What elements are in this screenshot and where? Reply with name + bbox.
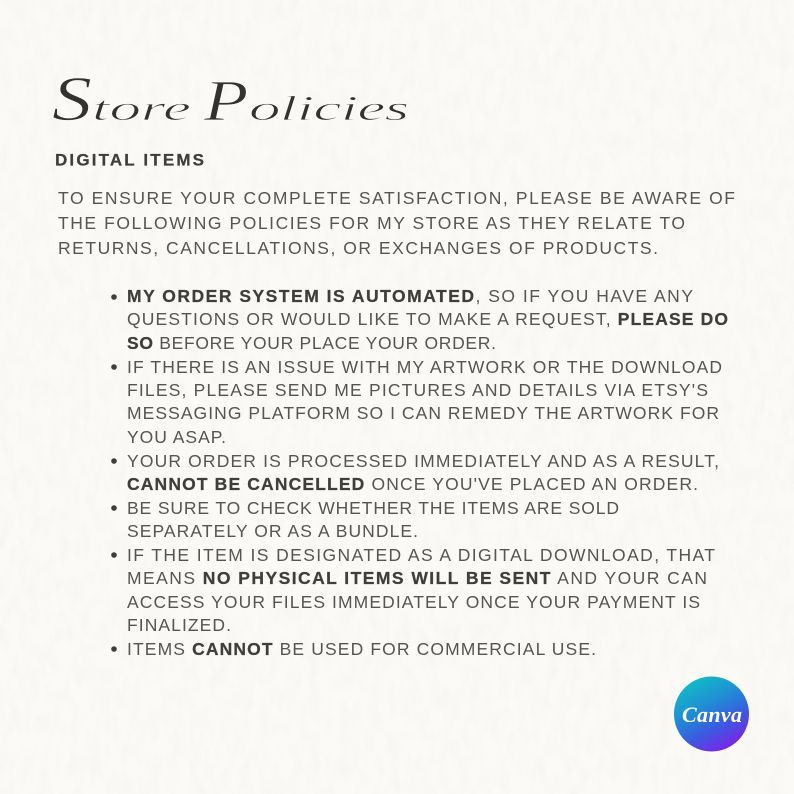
bullet 4: sold separately or bundle: BE SURE TO CHECK WHETHER THE ITEMS ARE SOLD bbox=[127, 498, 619, 518]
bullet 5: digital download: FINALIZED. bbox=[127, 615, 231, 635]
bullet 5: digital download: IF THE ITEM IS DESIGNATED AS A DIGITAL DOWNLOAD, THAT bbox=[127, 545, 715, 565]
bullet 4: sold separately or bundle: SEPARATELY OR AS A BUNDLE. bbox=[127, 521, 418, 541]
intro text block: RETURNS, CANCELLATIONS, OR EXCHANGES OF PRODUCTS. bbox=[58, 238, 658, 258]
heading: digital items: DIGITAL ITEMS bbox=[55, 150, 204, 170]
bullet 5: digital download: ACCESS YOUR FILES IMMEDIATELY ONCE YOUR PAYMENT IS bbox=[127, 592, 700, 612]
icon: canva logo: Canva bbox=[682, 702, 742, 727]
bullet 2: artwork issues: MESSAGING PLATFORM SO I CAN REMEDY THE ARTWORK FOR bbox=[127, 403, 719, 423]
bullet 5: digital download bbox=[111, 545, 715, 635]
title: tore bbox=[92, 90, 191, 128]
intro text block: THE FOLLOWING POLICIES FOR MY STORE AS THEY RELATE TO bbox=[58, 213, 685, 233]
bullet 2: artwork issues bbox=[111, 357, 722, 447]
bullet 1: automated order system: SO BEFORE YOUR PLACE YOUR ORDER. bbox=[127, 333, 496, 353]
bullet 6: commercial use: ITEMS CANNOT BE USED FOR COMMERCIAL USE. bbox=[127, 639, 596, 659]
bullet 1: automated order system: MY ORDER SYSTEM IS AUTOMATED, SO IF YOU HAVE ANY bbox=[127, 286, 693, 306]
intro text block bbox=[58, 188, 735, 258]
icon: canva logo bbox=[674, 676, 749, 752]
bullet 2: artwork issues: FILES, PLEASE SEND ME PICTURES AND DETAILS VIA ETSY'S bbox=[127, 380, 708, 400]
policy bullet list bbox=[111, 286, 728, 659]
bullet 3: cancellations: CANNOT BE CANCELLED ONCE YOU'VE PLACED AN ORDER. bbox=[127, 474, 698, 494]
title bbox=[52, 63, 409, 134]
bullet 1: automated order system bbox=[111, 286, 728, 353]
bullet 5: digital download: MEANS NO PHYSICAL ITEMS WILL BE SENT AND YOUR CAN bbox=[127, 568, 707, 588]
bullet 3: cancellations: YOUR ORDER IS PROCESSED IMMEDIATELY AND AS A RESULT, bbox=[127, 451, 719, 471]
bullet 2: artwork issues: YOU ASAP. bbox=[127, 427, 226, 447]
bullet 4: sold separately or bundle bbox=[111, 498, 619, 541]
title: P bbox=[203, 69, 248, 133]
bullet 3: cancellations bbox=[111, 451, 719, 494]
title: olicies bbox=[249, 90, 409, 128]
title: S bbox=[52, 63, 92, 134]
intro text block: TO ENSURE YOUR COMPLETE SATISFACTION, PLEASE BE AWARE OF bbox=[58, 188, 735, 208]
bullet 1: automated order system: QUESTIONS OR WOULD LIKE TO MAKE A REQUEST, PLEASE DO bbox=[127, 309, 728, 329]
bullet 2: artwork issues: IF THERE IS AN ISSUE WITH MY ARTWORK OR THE DOWNLOAD bbox=[127, 357, 722, 377]
